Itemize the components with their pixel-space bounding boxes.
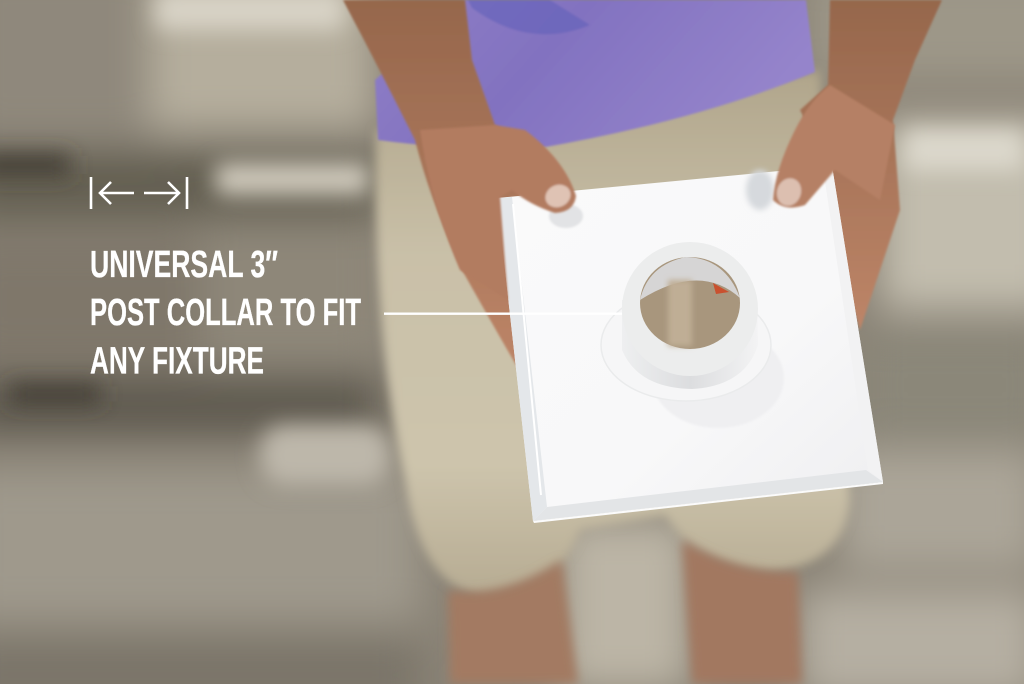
- round post collar: [601, 242, 771, 401]
- thumbnail: [542, 181, 574, 211]
- callout text: [90, 244, 361, 382]
- left thumb over plate: [420, 125, 576, 300]
- collar flange: [601, 289, 771, 401]
- person: shorts: [376, 70, 850, 596]
- person: purple shirt: [375, 0, 815, 148]
- right thumb over plate: [773, 85, 895, 209]
- square white plate: [497, 166, 883, 523]
- person: right arm and hand behind plate: [800, 0, 942, 330]
- collar body: [622, 300, 758, 389]
- collar shadow: [652, 328, 784, 428]
- thumbnail: [773, 175, 805, 209]
- collar ring: [622, 242, 758, 376]
- icon: width arrows: [91, 177, 187, 209]
- callout text: POST COLLAR TO FIT: [90, 292, 361, 334]
- callout line: [384, 312, 622, 315]
- collar hole: [640, 257, 740, 349]
- person: left arm and hand behind plate: [343, 0, 520, 372]
- callout text: ANY FIXTURE: [90, 340, 264, 382]
- collar inner wall: [640, 257, 740, 300]
- callout text: UNIVERSAL 3″: [90, 244, 278, 286]
- soft shadow of thumbs on plate: [549, 204, 583, 228]
- person: legs: [448, 540, 802, 684]
